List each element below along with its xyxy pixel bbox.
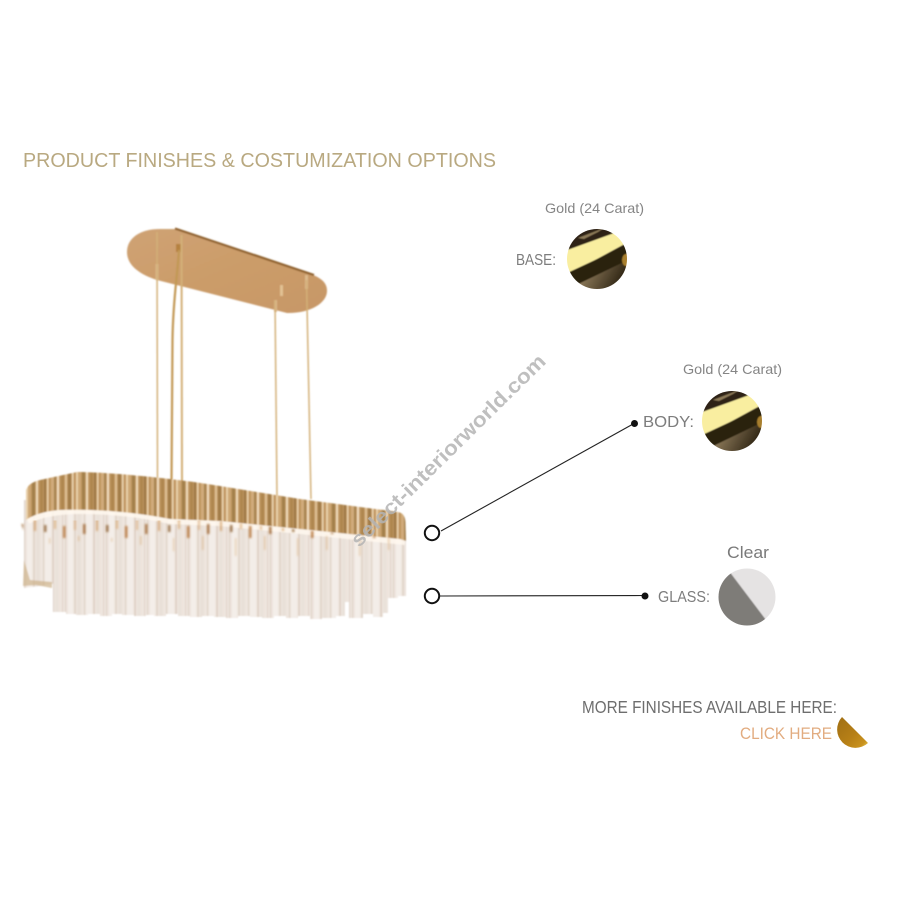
- body finish name: Gold (24 Carat): [683, 361, 782, 377]
- click here link: CLICK HERE: [740, 724, 832, 743]
- base finish name: Gold (24 Carat): [545, 200, 644, 216]
- watermark: select-interiorworld.com: [346, 350, 550, 552]
- icon: gold half circle: [837, 717, 868, 748]
- glass label: GLASS:: [658, 589, 710, 606]
- glass finish name: Clear: [727, 543, 769, 562]
- amber reflections in glass: [24, 524, 406, 556]
- body label: BODY:: [643, 414, 694, 431]
- lower glass tube tier: [53, 570, 388, 619]
- more finishes text: MORE FINISHES AVAILABLE HERE:: [582, 697, 837, 717]
- body gold swatch: [702, 391, 762, 451]
- base label: BASE:: [516, 252, 556, 269]
- chandelier product image: [23, 228, 406, 619]
- suspension rods: [157, 232, 311, 499]
- glow below metal band: [28, 511, 405, 542]
- clear glass swatch: [718, 568, 776, 626]
- ceiling canopy: [127, 228, 327, 313]
- title: PRODUCT FINISHES & COSTUMIZATION OPTIONS: [23, 150, 496, 172]
- upper glass tube tier: [24, 500, 406, 598]
- base gold swatch: [567, 229, 627, 289]
- callout: body marker and leader line: [425, 420, 638, 540]
- inner metal edge at lower left: [23, 560, 52, 588]
- gold tube band: [26, 472, 406, 541]
- callout: glass marker and leader line: [425, 589, 648, 603]
